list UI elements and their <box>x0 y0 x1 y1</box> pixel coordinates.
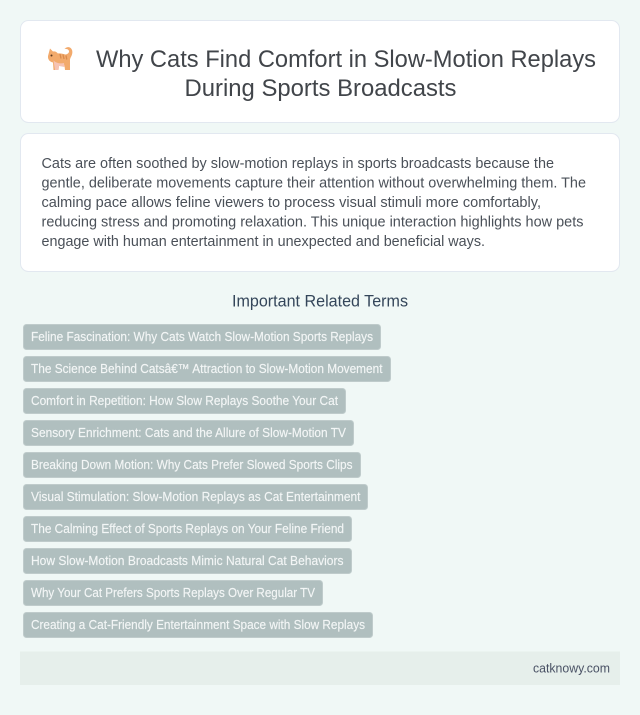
chip 1 <box>24 324 380 350</box>
panel: summary paragraph: engage with human entertainment in unexpected and beneficial ways. <box>42 234 485 250</box>
chip 3 <box>24 388 346 414</box>
chip 3: Comfort in Repetition: How Slow Replays Soothe Your Cat <box>31 394 338 408</box>
footer: source bar: catknowy.com <box>533 660 610 676</box>
chip 6: Visual Stimulation: Slow-Motion Replays as Cat Entertainment <box>31 490 361 504</box>
chip 1: Feline Fascination: Why Cats Watch Slow-Motion Sports Replays <box>31 330 373 344</box>
icon: cat emoji <box>48 47 72 70</box>
chip 4 <box>24 420 354 446</box>
chip 2 <box>24 356 390 382</box>
title text: Why Cats Find Comfort in Slow-Motion Replays <box>96 46 596 73</box>
chip 5 <box>24 452 360 478</box>
chip 9: Why Your Cat Prefers Sports Replays Over Regular TV <box>31 586 316 600</box>
chip 8 <box>24 548 352 574</box>
heading: important related terms: Important Related Terms <box>232 292 408 310</box>
title text <box>96 46 596 102</box>
chip 4: Sensory Enrichment: Cats and the Allure of Slow-Motion TV <box>31 426 347 440</box>
chip 10: Creating a Cat-Friendly Entertainment Space with Slow Replays <box>31 618 365 632</box>
chip 6 <box>24 484 368 510</box>
title text: During Sports Broadcasts <box>184 75 456 102</box>
footer: source bar <box>20 652 620 685</box>
chip 7: The Calming Effect of Sports Replays on Your Feline Friend <box>31 522 344 536</box>
panel: summary paragraph: gentle, deliberate movements capture their attention without overwhelming them. The <box>42 176 586 192</box>
chip 8: How Slow-Motion Broadcasts Mimic Natural Cat Behaviors <box>31 554 344 568</box>
chip 7 <box>24 516 352 542</box>
list: related term chips <box>24 324 390 638</box>
panel: title card <box>20 20 620 122</box>
chip 9 <box>24 580 322 606</box>
chip 10 <box>24 612 372 638</box>
chip 5: Breaking Down Motion: Why Cats Prefer Slowed Sports Clips <box>31 458 352 472</box>
panel: summary paragraph: calming pace allows feline viewers to process visual stimuli more comfortably, <box>42 195 541 211</box>
panel: summary paragraph: reducing stress and promoting relaxation. This unique interaction highlights how pets <box>42 214 584 230</box>
panel: summary paragraph: Cats are often soothed by slow-motion replays in sports broadcasts because the <box>42 156 554 172</box>
panel: summary paragraph <box>20 134 620 272</box>
chip 2: The Science Behind Catsâ€™ Attraction to Slow-Motion Movement <box>31 362 383 376</box>
